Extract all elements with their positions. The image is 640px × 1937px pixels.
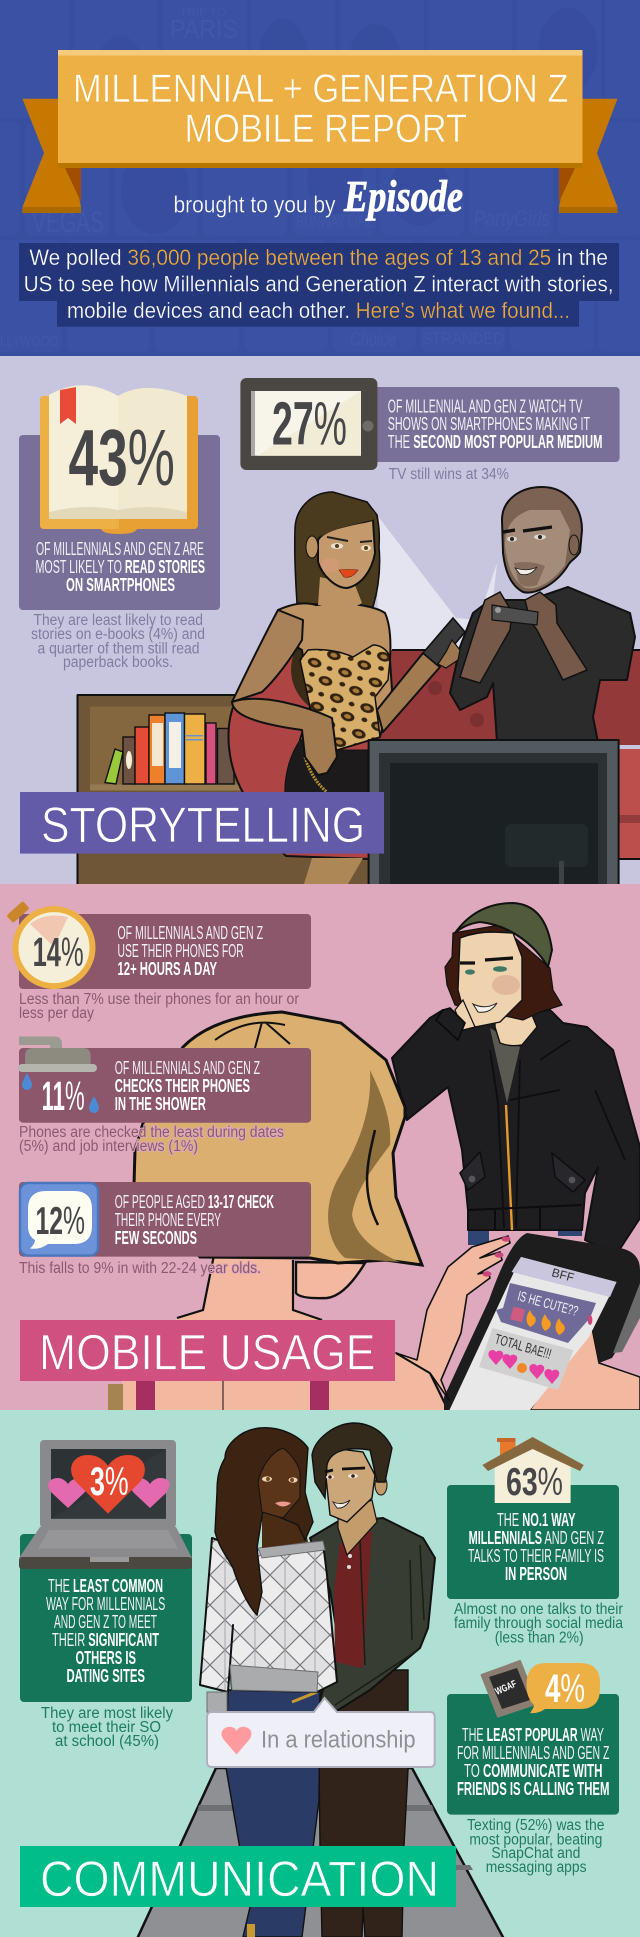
woman's jeans — [226, 1690, 320, 1937]
beanie — [455, 903, 552, 967]
jeans — [468, 1225, 489, 1245]
panel text: MILLENNIALS AND GEN Z — [469, 1528, 604, 1548]
woman's sweater — [200, 1538, 337, 1692]
panel text — [46, 1576, 165, 1686]
neck — [495, 1003, 537, 1046]
header background: TRIP TO — [180, 7, 226, 19]
her legs — [304, 858, 363, 884]
byline with Episode logo: Episode — [343, 172, 463, 221]
title — [73, 67, 568, 151]
man's jacket — [310, 1518, 435, 1712]
woman's face — [258, 1448, 300, 1518]
grey message: TOTAL BAE!!! — [493, 1331, 553, 1362]
left arm — [232, 610, 303, 702]
panel text: ON SMARTPHONES — [66, 575, 175, 595]
heading: communication: COMMUNICATION — [40, 1851, 439, 1907]
man's trousers — [318, 1670, 408, 1937]
icon: tablet — [240, 378, 377, 470]
note: least likely to read on e-books: paperback books. — [63, 654, 173, 671]
forearms and hands — [460, 592, 512, 683]
hair — [445, 925, 562, 1020]
note: falls to 9%: This falls to 9% in with 22-24 year olds. — [19, 1260, 261, 1277]
note: meet at school — [41, 1705, 173, 1750]
pockets — [460, 1152, 585, 1192]
panel text — [457, 1725, 609, 1799]
panel text — [468, 1510, 604, 1584]
section background: mobile usage — [0, 884, 640, 1410]
note: social media: Almost no one talks to their — [454, 1601, 623, 1618]
panel: 14% use phones 12+ hours — [6, 901, 311, 989]
panel: 43% read stories on smartphones — [19, 385, 220, 610]
heading: storytelling: STORYTELLING — [41, 797, 365, 853]
ribbon tail left — [22, 99, 81, 213]
sweater hem and cuff — [207, 1541, 325, 1712]
header background: LLYWOOD — [0, 333, 58, 350]
icon: tablet WGAF — [482, 1661, 537, 1716]
header background: RUNWAY LIFE — [296, 212, 372, 231]
her phone — [423, 618, 465, 665]
note: meet at school: at school (45%) — [55, 1733, 159, 1750]
panel: 3% dating sites — [19, 1440, 192, 1702]
note: phones checked least: (5%) and job interviews (1%) — [19, 1138, 198, 1155]
walkway — [137, 1768, 504, 1937]
note: least likely to read on e-books: They are least likely to read — [34, 612, 203, 629]
scene: couple illustration — [137, 1423, 504, 1937]
panel text: THEIR SIGNIFICANT — [52, 1630, 159, 1650]
panel text: FEW SECONDS — [115, 1228, 197, 1248]
relationship status label — [207, 1698, 435, 1767]
head — [318, 520, 375, 588]
icon: house — [482, 1437, 584, 1503]
neck — [318, 577, 362, 612]
note: texting most popular: messaging apps — [486, 1859, 587, 1876]
note: TV still wins: TV still wins at 34% — [389, 466, 509, 483]
stat: 11%: 11% — [42, 1073, 85, 1119]
panel: 27% watch TV on smartphones — [240, 378, 620, 470]
man's neck — [338, 1500, 377, 1555]
intro text block: We polled 36,000 people between the ages of 13 and 25 in the — [29, 245, 608, 270]
panel text: AND GEN Z TO MEET — [54, 1612, 157, 1632]
intro text block — [19, 243, 619, 327]
man with phone — [450, 487, 635, 742]
icon: stopwatch — [6, 901, 93, 986]
panel text: MOST LIKELY TO READ STORIES — [36, 557, 205, 577]
panel: 4% calling friends — [447, 1661, 619, 1815]
note: social media: (less than 2%) — [495, 1630, 584, 1646]
grey message — [479, 1328, 574, 1390]
note: less than 7%: less per day — [19, 1005, 94, 1022]
panel text: WAY FOR MILLENNIALS — [46, 1594, 165, 1614]
forearm and hip hand — [232, 699, 337, 775]
panel text: CHECKS THEIR PHONES — [115, 1076, 250, 1096]
left hand — [396, 1236, 510, 1400]
title: MOBILE REPORT — [184, 107, 467, 151]
books — [105, 713, 234, 784]
header background: Choice — [350, 329, 396, 351]
note: social media: family through social media — [454, 1615, 623, 1632]
light beam — [377, 515, 500, 650]
note: phones checked least — [19, 1124, 284, 1155]
section background: communication — [0, 1410, 640, 1937]
note: texting most popular: Texting (52%) was the — [467, 1817, 604, 1834]
intro text block: mobile devices and each other. Here’s what we found... — [67, 298, 570, 323]
man's head — [375, 1475, 387, 1495]
panel text: DATING SITES — [66, 1666, 145, 1686]
note: less than 7%: Less than 7% use their phones for an hour or — [19, 991, 299, 1008]
note: social media — [454, 1601, 623, 1646]
stat: 43%: 43% — [68, 413, 175, 502]
scene: mobile usage illustration — [108, 903, 640, 1410]
panel text: THE LEAST POPULAR WAY — [462, 1725, 604, 1745]
phone body — [444, 1233, 640, 1410]
byline with Episode logo — [174, 172, 463, 221]
header background: PARIS — [170, 14, 238, 44]
panel: 11% check phones in shower — [18, 1036, 311, 1123]
panel text — [115, 1058, 260, 1114]
tee shirt — [490, 1028, 520, 1103]
icon: speech bubble — [526, 1663, 600, 1713]
panel text: OF MILLENNIALS AND GEN Z — [118, 923, 263, 943]
header background: PartyGirls — [474, 206, 550, 231]
woman from behind — [108, 1012, 450, 1410]
note: texting most popular: SnapChat and — [491, 1845, 580, 1862]
phone in hand — [396, 1233, 640, 1410]
header background — [0, 0, 640, 356]
ribbon tail right — [559, 99, 618, 213]
man's shirt — [334, 1530, 372, 1668]
note: least likely to read on e-books — [31, 612, 205, 671]
jaw — [296, 1262, 365, 1298]
blonde hair — [134, 1012, 422, 1265]
note: texting most popular: most popular, beating — [469, 1831, 602, 1848]
panel text: 12+ HOURS A DAY — [118, 959, 217, 979]
stat: 4%: 4% — [545, 1667, 585, 1711]
icon: heart — [222, 1727, 251, 1754]
hair back — [295, 492, 380, 607]
heading: mobile usage: MOBILE USAGE — [39, 1324, 376, 1380]
note: phones checked least: Phones are checked the least during dates — [19, 1124, 284, 1141]
black skirt — [285, 740, 368, 795]
bookshelf — [78, 695, 378, 887]
zipper — [506, 1105, 512, 1230]
phone in hand: BFF — [550, 1265, 576, 1285]
stat: 27%: 27% — [272, 390, 347, 458]
panel: 63% talk in person — [447, 1437, 619, 1599]
purple message — [496, 1283, 596, 1343]
panel text — [388, 396, 602, 452]
panel text: THE NO.1 WAY — [497, 1510, 576, 1530]
scene: storytelling illustration — [78, 487, 640, 890]
icon: laptop with hearts — [19, 1440, 192, 1569]
sofa — [229, 642, 640, 860]
note: meet at school: to meet their SO — [52, 1719, 161, 1736]
note: less than 7% — [19, 991, 299, 1022]
jacket — [392, 1010, 640, 1255]
icon: shower head — [18, 1036, 99, 1113]
icon: open book — [40, 385, 198, 534]
man in beanie — [392, 903, 640, 1255]
woman's long hair — [215, 1428, 313, 1615]
relationship status label: In a relationship — [261, 1727, 416, 1754]
note: least likely to read on e-books: stories on e-books (4%) and — [31, 626, 205, 643]
section background: storytelling — [0, 356, 640, 884]
torso — [278, 603, 392, 750]
banner ribbon — [22, 50, 617, 213]
panel text: THEIR PHONE EVERY — [115, 1210, 221, 1230]
note: least likely to read on e-books: a quarter of them still read — [38, 640, 200, 658]
panel text — [118, 923, 263, 979]
hand and cuff — [455, 1000, 475, 1030]
panel text: OTHERS IS — [76, 1648, 136, 1668]
panel text: THE LEAST COMMON — [48, 1576, 163, 1596]
title: MILLENNIAL + GENERATION Z — [73, 67, 568, 111]
panel text: IN PERSON — [505, 1564, 567, 1584]
panel text: USE THEIR PHONES FOR — [118, 941, 244, 961]
byline with Episode logo: brought to you by — [174, 192, 336, 218]
panel text: IN THE SHOWER — [115, 1094, 206, 1114]
icon: tablet WGAF: WGAF — [494, 1679, 518, 1698]
right arm — [377, 653, 440, 732]
stat: 3%: 3% — [90, 1460, 129, 1504]
phone — [492, 605, 538, 625]
panel text: OF MILLENNIALS AND GEN Z ARE — [36, 539, 204, 559]
television — [369, 740, 619, 890]
panel text: OF MILLENNIALS AND GEN Z — [115, 1058, 260, 1078]
sweater — [450, 587, 635, 742]
panel text: OF PEOPLE AGED 13-17 CHECK — [115, 1192, 274, 1212]
icon: message bubble — [20, 1183, 98, 1256]
purple message: IS HE CUTE?? — [516, 1287, 580, 1319]
header background: STRANDED — [422, 329, 504, 348]
head — [502, 487, 582, 593]
panel: 12% check phone every few seconds — [19, 1182, 311, 1257]
phone screen — [450, 1257, 616, 1410]
header background: VEGAS — [32, 206, 104, 239]
panel text — [36, 539, 205, 595]
right palm — [530, 1313, 640, 1410]
face — [458, 932, 522, 1027]
stat: 12%: 12% — [36, 1200, 85, 1243]
leopard bustier — [300, 645, 390, 750]
neck and shoulders — [122, 1250, 450, 1410]
woman's neck — [262, 1505, 308, 1548]
panel text — [115, 1192, 274, 1248]
woman — [232, 492, 465, 884]
nails and thumb — [482, 1236, 592, 1325]
stat: 14%: 14% — [33, 929, 84, 975]
stat: 63%: 63% — [506, 1461, 563, 1504]
note: meet at school: They are most likely — [41, 1705, 173, 1722]
note: texting most popular — [467, 1817, 604, 1876]
